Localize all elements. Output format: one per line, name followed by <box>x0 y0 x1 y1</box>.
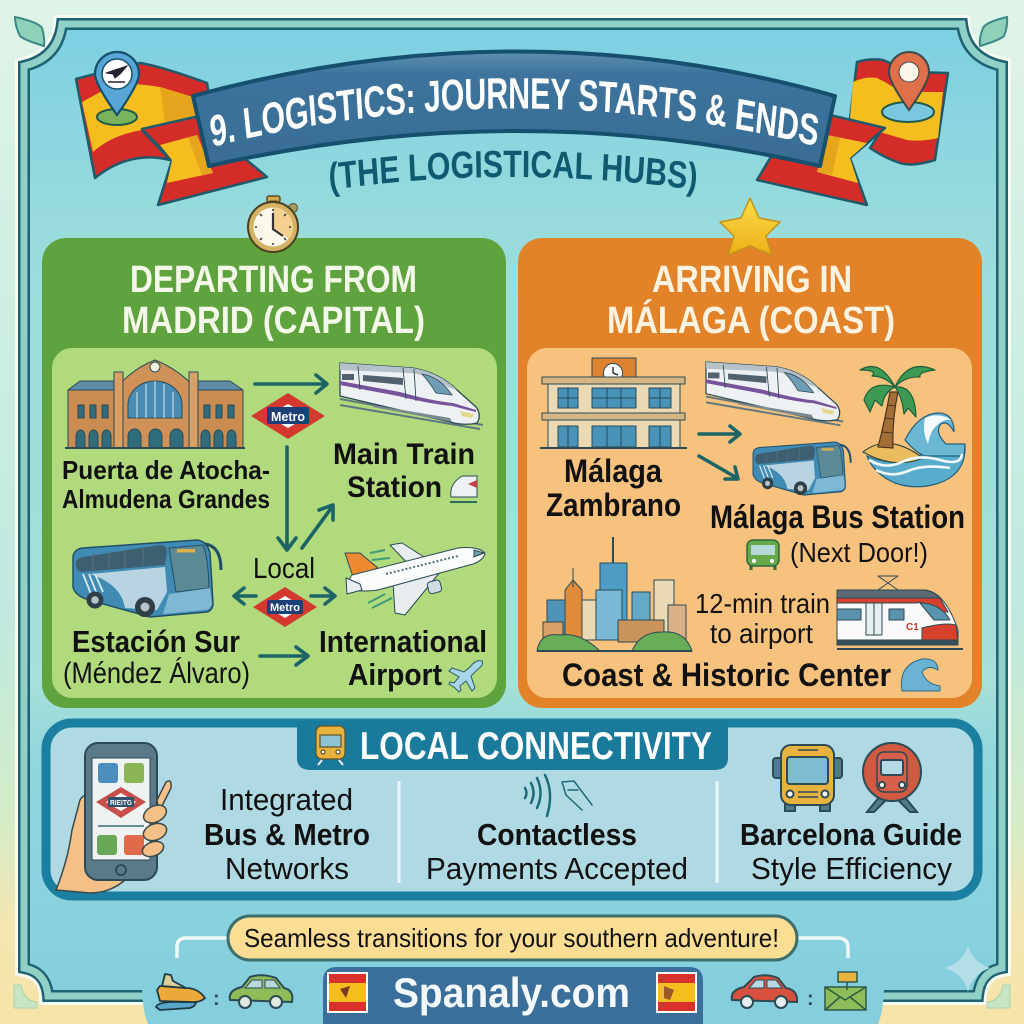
label: Estación Sur: (Méndez Álvaro) <box>63 657 250 690</box>
label: Atocha <box>62 455 270 514</box>
corner leaf right <box>980 17 1007 46</box>
icon: Metro sign lower <box>253 587 317 627</box>
arrow: down to local <box>278 447 296 550</box>
corner ornament left <box>14 985 37 1008</box>
icon: flag stamp right <box>656 972 697 1013</box>
icon: small green bus <box>747 540 779 570</box>
text: bus and metro: Integrated <box>220 782 353 817</box>
icon: commuter train <box>837 576 963 649</box>
icon: hand holding phone <box>56 743 171 893</box>
label: train to airport <box>695 588 830 649</box>
icon: Metro sign lower: Metro <box>270 602 300 614</box>
icon: airport location pin <box>95 52 139 125</box>
text: contactless: Contactless <box>477 817 637 852</box>
label: Málaga Zambrano <box>546 453 681 523</box>
corner ornament right <box>987 985 1010 1008</box>
icon: ferry <box>156 974 205 1010</box>
icon: yellow bus <box>773 745 842 811</box>
label: train to airport: to airport <box>710 618 813 649</box>
icon: contactless <box>525 775 592 816</box>
left Spanish flag ribbons <box>76 63 267 205</box>
icon: stopwatch <box>248 196 298 252</box>
icon: palm tree and wave <box>860 366 965 487</box>
label: Estación Sur: Estación Sur <box>72 624 240 659</box>
icon: tab train <box>316 726 345 765</box>
title banner <box>191 50 837 168</box>
label: next door: (Next Door!) <box>790 537 928 568</box>
text: Barcelona guide: Barcelona Guide <box>740 817 962 852</box>
icon: Málaga Zambrano station <box>540 358 687 448</box>
heading: arriving <box>607 259 895 342</box>
icon: small train <box>450 476 477 502</box>
heading: arriving: ARRIVING IN <box>652 259 852 301</box>
heading: departing: MADRID (CAPITAL) <box>122 300 425 342</box>
icon: hand holding phone: RIEITG <box>110 798 132 807</box>
icon: commuter train: C1 <box>906 622 919 633</box>
label: main train station: Main Train <box>333 438 475 471</box>
icon: city skyline <box>537 537 692 651</box>
icon: coach bus <box>753 442 851 495</box>
arrow: local to train station <box>302 505 333 548</box>
icon: Atocha station building <box>65 360 245 448</box>
connector lines <box>177 938 848 958</box>
icon: coach bus <box>73 540 221 617</box>
heading: departing <box>122 259 425 342</box>
icon: airplane <box>345 543 485 615</box>
icon: high-speed train <box>340 363 483 429</box>
title: 9. LOGISTICS: JOURNEY STARTS & ENDS <box>210 78 818 146</box>
label: Málaga Zambrano: Zambrano <box>546 487 681 523</box>
subtitle: (THE LOGISTICAL HUBS) <box>330 150 696 197</box>
spanaly badge <box>323 967 703 1024</box>
heading: arriving: MÁLAGA (COAST) <box>607 298 895 342</box>
text: bus and metro: Bus & Metro <box>204 817 370 852</box>
text: contactless: Payments Accepted <box>426 851 688 886</box>
icon: flag stamp left <box>327 972 368 1013</box>
sea bowl <box>867 446 965 487</box>
text: contactless <box>426 817 688 886</box>
heading: local connectivity: LOCAL CONNECTIVITY <box>360 725 712 768</box>
icon: destination location pin <box>882 52 934 122</box>
arrow: metro to bus station <box>234 588 256 604</box>
panel: local connectivity <box>46 721 978 896</box>
label: main train station <box>333 438 475 504</box>
label: local: Local <box>253 553 315 585</box>
icon: Metro sign: Metro <box>271 409 305 424</box>
right Spanish flag ribbons <box>757 59 948 205</box>
icon: small wave <box>901 659 940 691</box>
tagline pill <box>228 916 797 960</box>
colon: : <box>213 988 220 1010</box>
label: Atocha: Almudena Grandes <box>62 484 270 514</box>
icon: red car <box>732 975 797 1008</box>
text: Barcelona guide <box>740 817 962 886</box>
corner leaf left <box>15 17 44 46</box>
icon: gold star <box>720 198 780 255</box>
text: Barcelona guide: Style Efficiency <box>751 851 952 886</box>
label: Estación Sur <box>63 624 250 690</box>
label: international airport: International <box>319 624 487 659</box>
header tab <box>297 721 728 770</box>
footer tab <box>142 984 884 1024</box>
arrow: bus station to airport <box>260 647 308 665</box>
label: main train station: Station <box>347 471 442 504</box>
label: international airport <box>319 624 487 692</box>
icon: envelope with sign <box>825 972 866 1010</box>
text: bus and metro <box>204 782 370 886</box>
icon: small airplane <box>449 661 482 692</box>
brand name: Spanaly.com <box>393 969 630 1016</box>
arrow: Atocha to train <box>255 375 327 393</box>
label: train to airport: 12-min train <box>695 588 830 619</box>
label: Málaga bus station: Málaga Bus Station <box>710 499 965 535</box>
arrow: to train <box>699 426 740 442</box>
icon: green car <box>230 975 292 1008</box>
label: international airport: Airport <box>348 657 442 692</box>
heading: departing: DEPARTING FROM <box>130 259 417 301</box>
panel: departing from Madrid <box>42 196 506 708</box>
label: coast and historic center: Coast & Historic Center <box>562 657 891 693</box>
label: Málaga Zambrano: Málaga <box>564 453 662 489</box>
colon: : <box>807 988 814 1010</box>
sparkle <box>945 945 990 992</box>
label: Atocha: Puerta de Atocha- <box>62 455 270 485</box>
arrow: metro to airport <box>311 588 335 604</box>
text: bus and metro: Networks <box>225 851 349 886</box>
arrow: to bus <box>699 456 738 479</box>
panel: arriving in Málaga <box>518 198 982 708</box>
tagline pill: Seamless transitions for your southern adventure! <box>244 923 779 953</box>
icon: red metro train <box>863 743 921 812</box>
icon: Metro sign <box>251 393 325 439</box>
icon: high-speed train <box>706 362 843 425</box>
